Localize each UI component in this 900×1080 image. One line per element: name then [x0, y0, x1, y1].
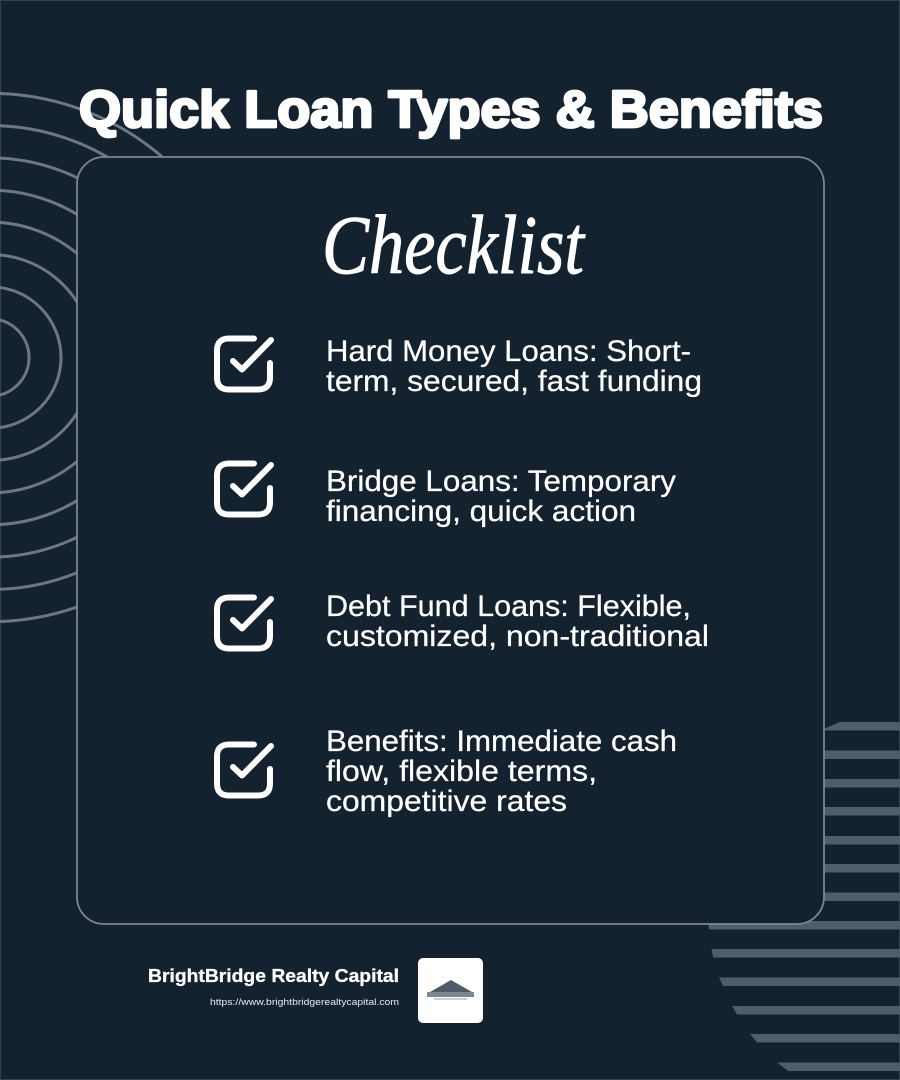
icon: checkbox	[217, 464, 271, 514]
item text: flow, flexible terms,	[326, 755, 597, 788]
item: hard money loans	[217, 335, 702, 398]
footer: website url: https://www.brightbridgerealtycapital.com	[210, 997, 399, 1008]
logo tagline	[434, 998, 467, 1000]
item text: competitive rates	[326, 785, 567, 818]
icon: building roof	[430, 980, 472, 992]
item text: Benefits: Immediate cash	[326, 725, 677, 758]
decorative concentric rings	[0, 93, 254, 622]
item text: term, secured, fast funding	[326, 365, 702, 398]
item text	[326, 725, 677, 818]
panel: checklist	[77, 157, 824, 924]
logo	[418, 958, 483, 1023]
item text	[326, 465, 676, 528]
item text: financing, quick action	[326, 495, 636, 528]
item text: Bridge Loans: Temporary	[326, 465, 676, 498]
logo wordmark	[427, 992, 474, 997]
item: debt fund loans	[217, 590, 709, 653]
item text: Debt Fund Loans: Flexible,	[326, 590, 691, 623]
item: benefits	[217, 725, 677, 818]
panel background	[77, 157, 824, 924]
icon: checkbox	[217, 338, 271, 390]
title: Quick Loan Types & Benefits	[79, 81, 823, 139]
checklist heading: Checklist	[322, 199, 586, 292]
item: bridge loans	[217, 464, 676, 528]
decorative stripes	[708, 722, 900, 1071]
item text: Hard Money Loans: Short-	[326, 335, 691, 368]
item text	[326, 335, 702, 398]
icon: checkbox	[217, 598, 271, 648]
footer: company name: BrightBridge Realty Capital	[148, 966, 399, 986]
item text: customized, non-traditional	[326, 620, 709, 653]
item text	[326, 590, 709, 653]
icon: checkbox	[217, 744, 271, 796]
